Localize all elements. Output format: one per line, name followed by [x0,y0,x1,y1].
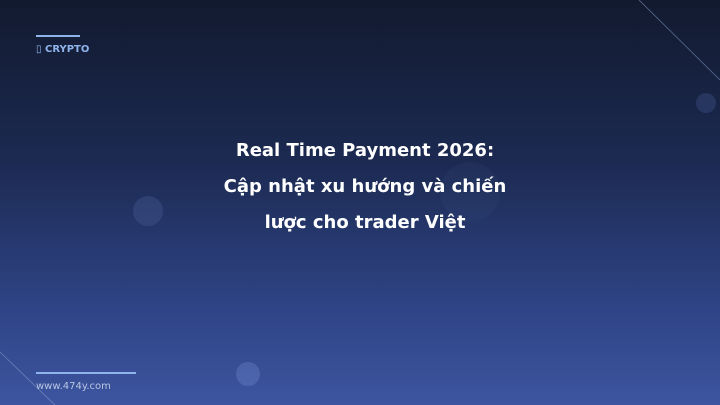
website footer: www.474y.com [36,381,111,392]
bottom accent line [36,372,136,374]
title [224,140,506,233]
top accent line [36,35,80,37]
title: lược cho trader Việt [265,212,465,233]
title: Cập nhật xu hướng và chiến [224,176,506,197]
title: Real Time Payment 2026: [236,140,494,161]
category label: ▯ CRYPTO [36,44,89,55]
